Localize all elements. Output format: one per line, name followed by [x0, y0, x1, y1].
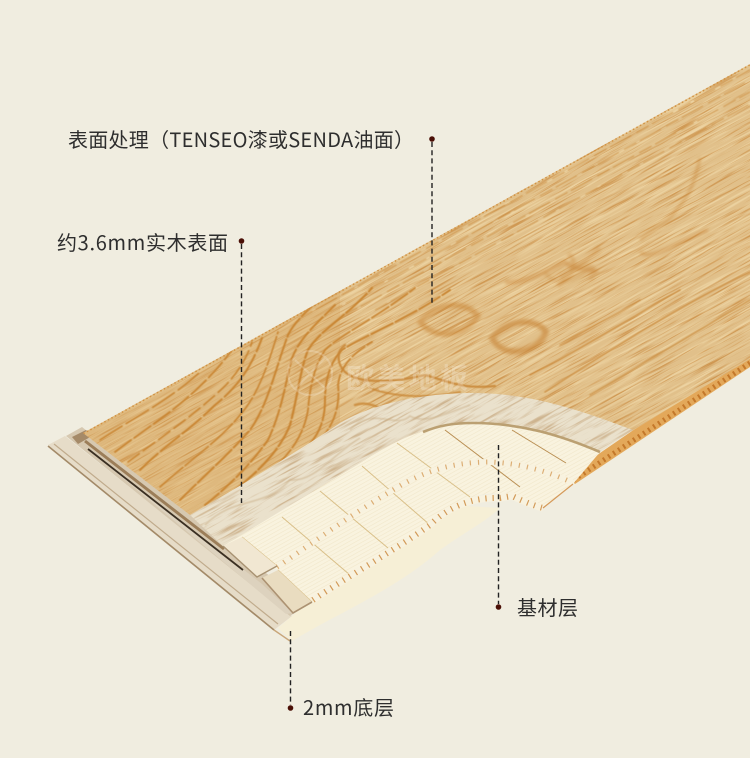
callout: bottom layer	[288, 631, 394, 721]
callout: solid wood surface	[57, 227, 244, 503]
upper lamella edge	[277, 462, 573, 567]
layer: oak plank surface	[83, 64, 750, 515]
light strip end pieces	[223, 537, 312, 613]
bottom layer: pale backing board	[278, 505, 500, 641]
watermark logo	[288, 351, 332, 395]
callout: base layer: 基材层	[517, 592, 578, 621]
serrated top edge	[83, 64, 750, 433]
surface veneer cutaway	[190, 393, 633, 546]
callout: solid wood surface: 约3.6mm实木表面	[57, 227, 228, 256]
side of base layer	[543, 484, 573, 508]
plank joint lines	[242, 430, 566, 602]
warmer tone at the left end	[83, 290, 340, 515]
left edge: bottom tongue board	[48, 436, 292, 641]
fan grain at the left end of the plank	[100, 288, 450, 505]
base layer: pine strips	[223, 423, 600, 603]
oval knots	[420, 158, 708, 351]
veneer underside edge	[423, 423, 600, 452]
left edge: middle layers	[66, 427, 300, 616]
watermark text: 欧美地板	[346, 357, 468, 397]
lower lamella edge	[313, 496, 543, 600]
callout: surface treatment	[68, 124, 435, 303]
cathedral grain figure	[339, 272, 750, 412]
callout: surface treatment: 表面处理（TENSEO漆或SENDA油面）	[68, 124, 414, 153]
callout: bottom layer: 2mm底层	[303, 692, 394, 721]
orange right side edge	[569, 359, 750, 484]
callout: base layer	[496, 445, 578, 621]
fine grain along top edge	[300, 70, 750, 318]
